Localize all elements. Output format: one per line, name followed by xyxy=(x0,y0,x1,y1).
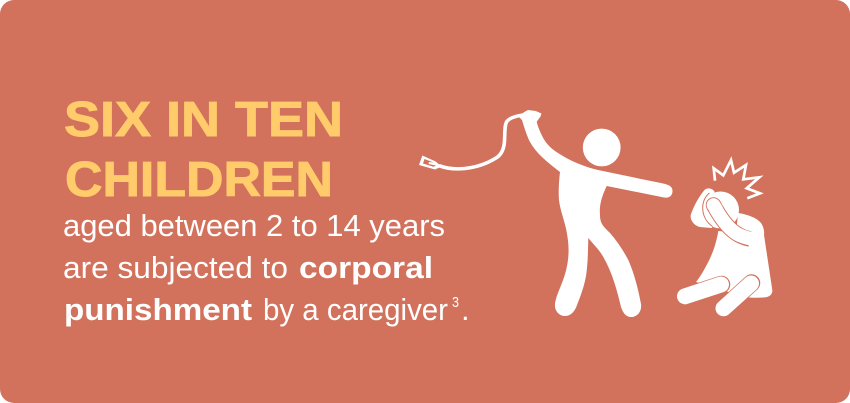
text block: description: punishment xyxy=(64,292,252,327)
text block: description: corporal xyxy=(299,250,433,285)
heading: CHILDREN xyxy=(65,153,333,207)
icon: adult with whip xyxy=(419,110,672,317)
forearm hand cap xyxy=(706,197,721,213)
text block: description: aged between 2 to 14 years xyxy=(63,208,445,243)
text block: description xyxy=(63,208,470,327)
heading: SIX IN TEN xyxy=(64,93,343,147)
icon: crouching child xyxy=(685,160,772,308)
child shoulder xyxy=(735,213,764,245)
child arm behind head xyxy=(691,188,714,228)
text block: description: by a caregiver xyxy=(263,292,448,327)
adult body xyxy=(519,110,672,317)
child right leg xyxy=(724,283,752,308)
child forearm xyxy=(714,205,750,239)
child left leg xyxy=(686,284,722,296)
head outline edge xyxy=(703,193,712,226)
text block: description: . xyxy=(461,292,470,327)
whip lash xyxy=(440,115,523,169)
adult head xyxy=(583,129,621,166)
child head xyxy=(702,192,739,228)
text block: description: are subjected to xyxy=(63,250,288,285)
text block: description: 3 xyxy=(452,294,459,311)
child body xyxy=(696,231,772,298)
heading xyxy=(64,93,343,207)
impact star xyxy=(714,160,760,198)
whip tip xyxy=(419,156,442,170)
